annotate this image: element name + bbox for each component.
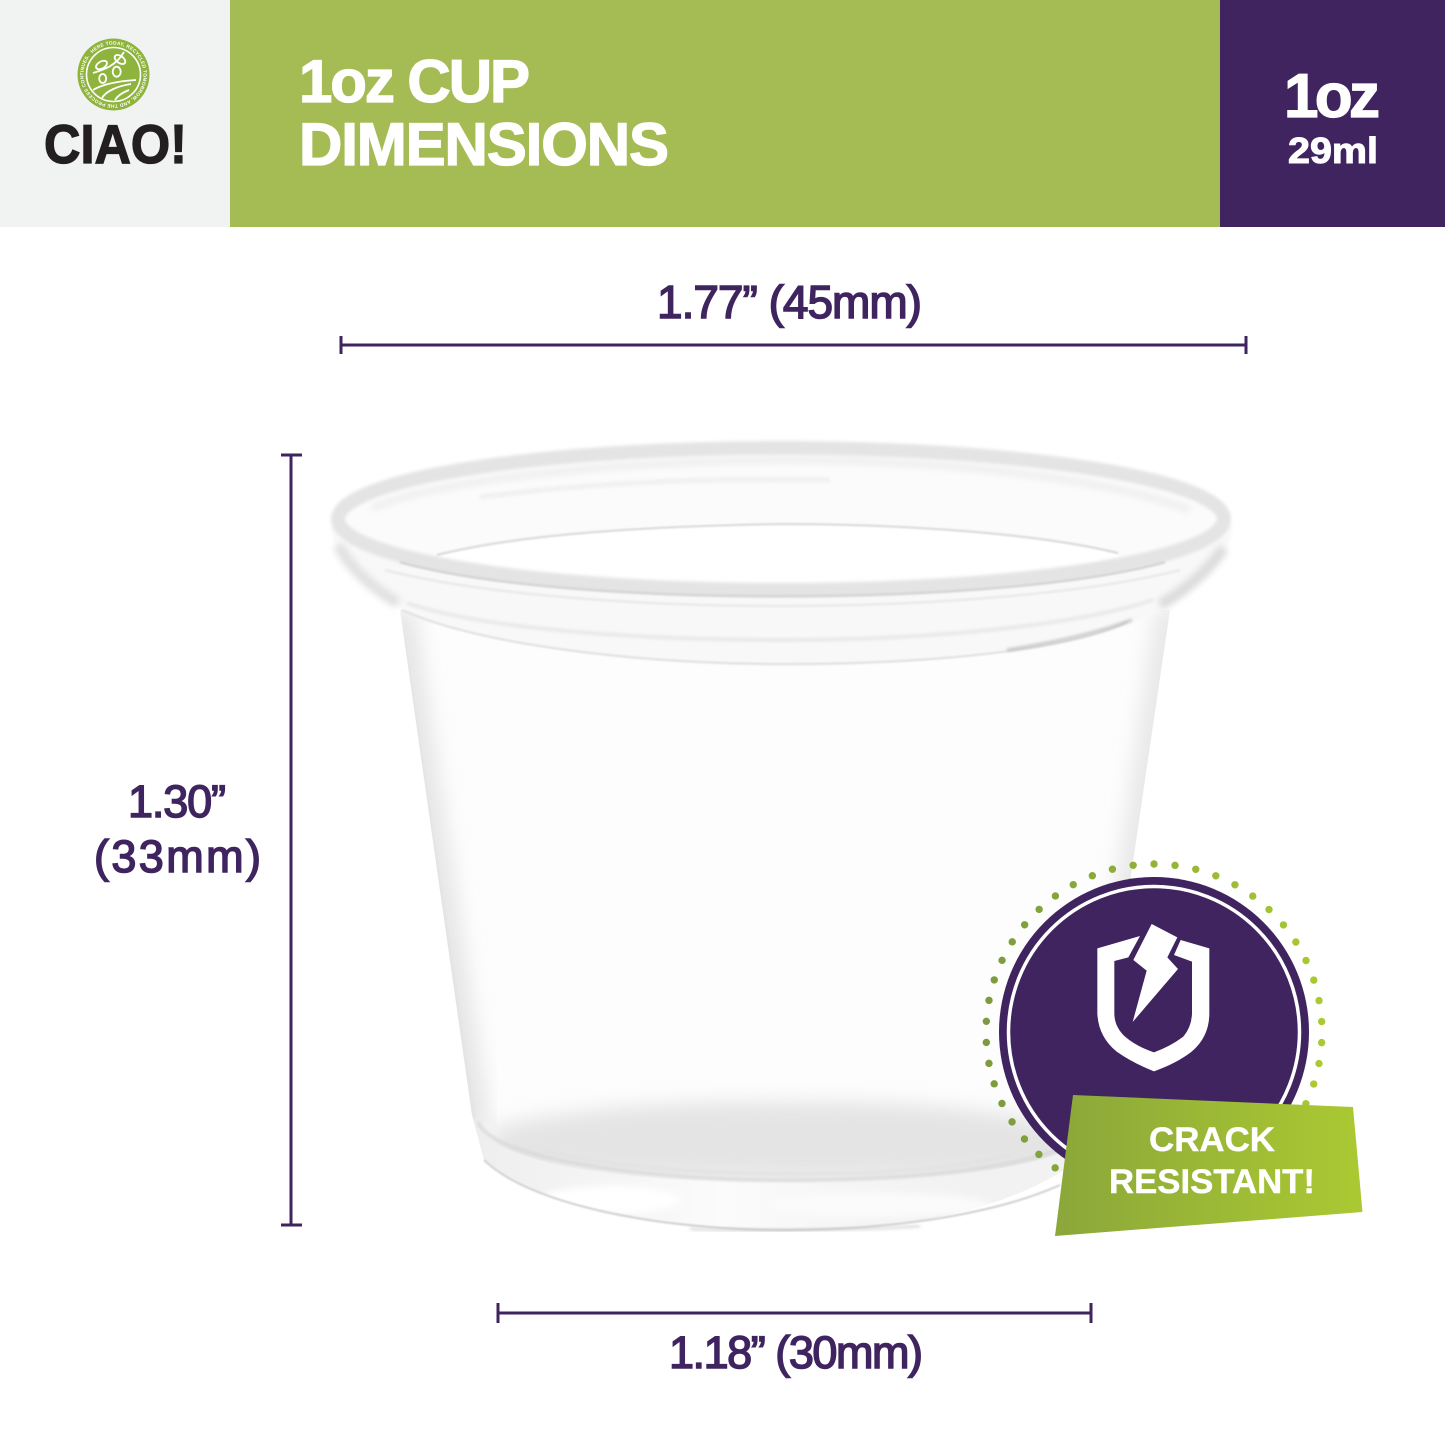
- icon: olive badge logo: HERE TODAY, RECYCLED TOMORROW, AND THE PROCESS CONTINUES.: [80, 41, 147, 108]
- banner text line 1: CRACK: [1149, 1121, 1275, 1159]
- title line 1: 1oz CUP: [299, 48, 530, 115]
- label: height millimetres: (33mm): [94, 831, 261, 882]
- dimension: base width: [498, 1303, 1091, 1378]
- capacity in millilitres: 29ml: [1288, 130, 1378, 171]
- rim outer band: [338, 448, 1224, 590]
- cup base shading: [485, 1102, 1085, 1178]
- title line 2: DIMENSIONS: [299, 111, 669, 178]
- rim opening: [341, 449, 1221, 589]
- brand wordmark: CIAO!: [44, 113, 187, 175]
- flange under rim: [331, 525, 1233, 665]
- icon: cracked shield with lightning bolt: [1097, 924, 1209, 1071]
- banner: [1055, 1095, 1362, 1236]
- purple disc: [999, 877, 1309, 1187]
- bracket: height: [281, 455, 302, 1225]
- label: height inches: 1.30”: [128, 776, 226, 827]
- banner text line 2: RESISTANT!: [1109, 1163, 1315, 1201]
- bracket: top width: [341, 336, 1246, 354]
- header panel: capacity: [1220, 0, 1445, 227]
- label: top width: 1.77” (45mm): [657, 276, 922, 328]
- dotted ring: [986, 864, 1322, 1200]
- label: base width: 1.18” (30mm): [669, 1327, 923, 1378]
- capacity in ounces: 1oz: [1284, 62, 1380, 131]
- badge: crack resistant: [986, 864, 1362, 1236]
- bracket: base width: [498, 1303, 1091, 1323]
- clear plastic cup: [331, 448, 1233, 1240]
- cup body: [390, 600, 1190, 1240]
- inner lines: [437, 524, 1118, 555]
- header panel: title: [230, 0, 1220, 227]
- dimension: top width: [341, 276, 1246, 354]
- cup rim: [331, 448, 1233, 665]
- dimension: height: [94, 455, 302, 1225]
- header panel: logo: [0, 0, 230, 227]
